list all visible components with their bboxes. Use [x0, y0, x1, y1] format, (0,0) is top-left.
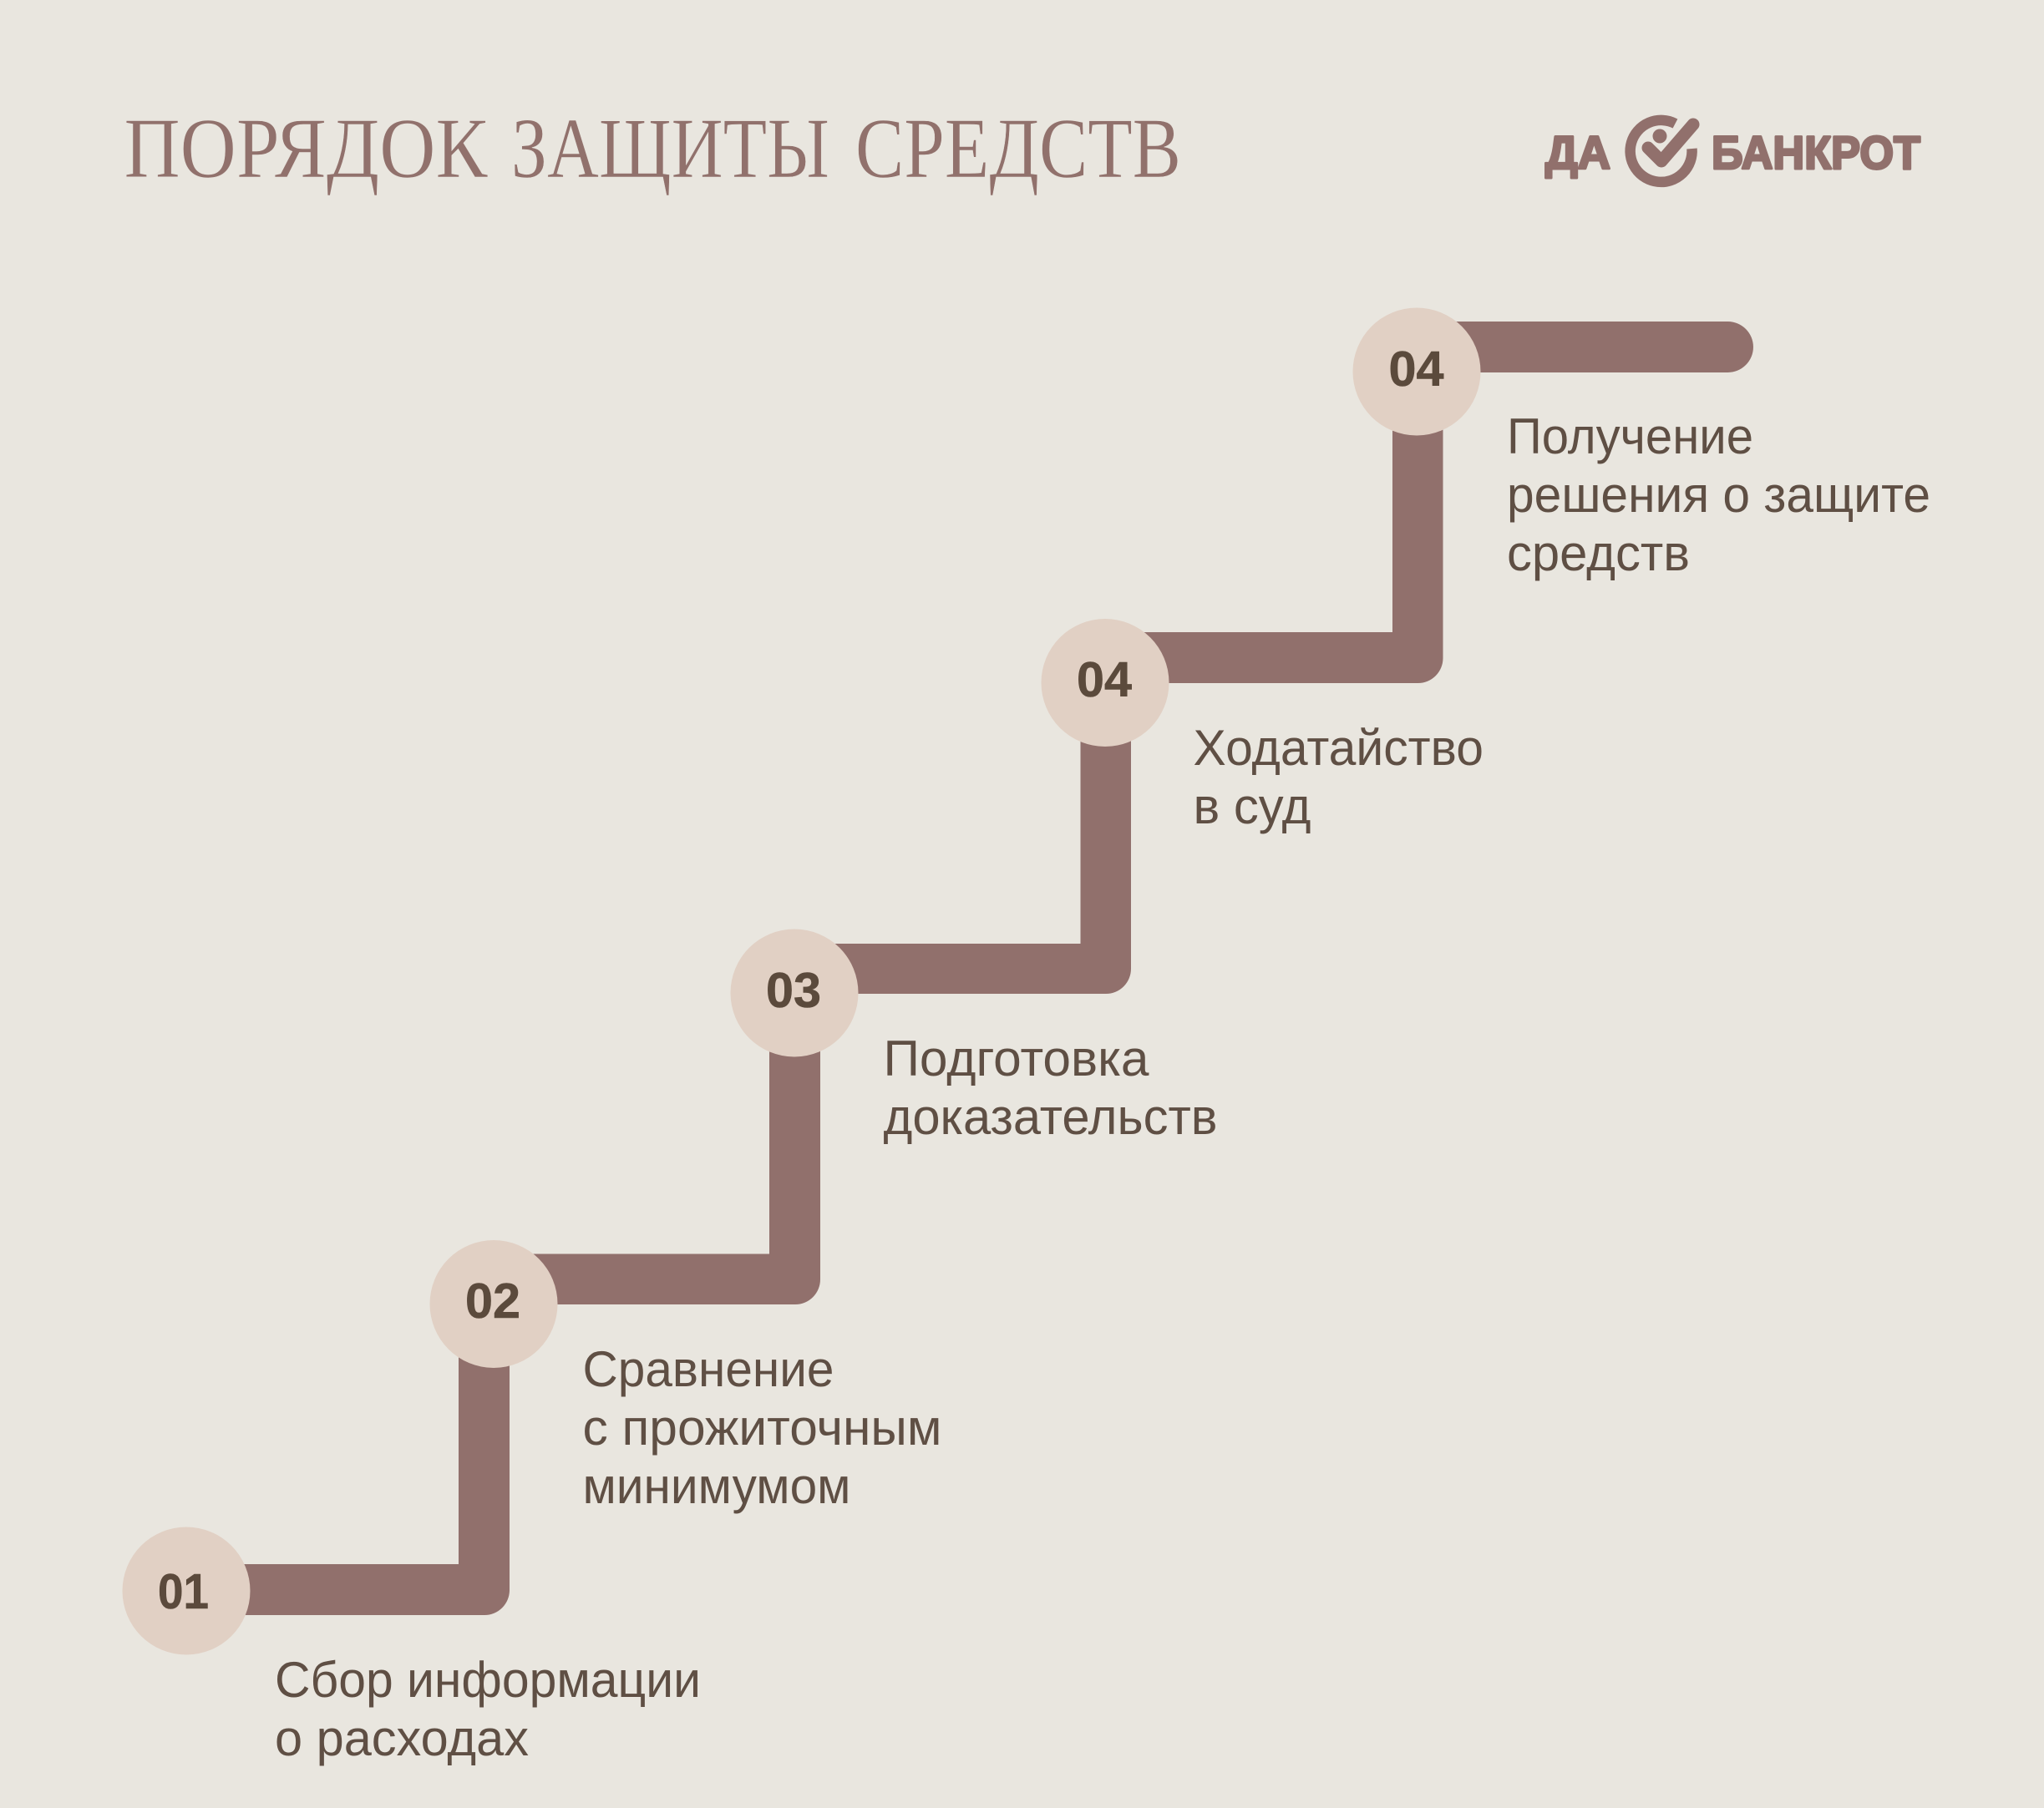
- step 2 circle: [429, 1240, 558, 1368]
- step 1: [122, 1527, 701, 1766]
- step 4: [1041, 619, 1484, 834]
- icon: ring with check mark: [1631, 120, 1693, 182]
- step 1 number: 01: [158, 1564, 209, 1619]
- step 1 text: о расходах: [275, 1710, 529, 1766]
- title: СРЕДСТВ: [855, 101, 1181, 196]
- step 2: [429, 1240, 942, 1514]
- step 1 text: [275, 1652, 701, 1766]
- step 1 text: Сбор информации: [275, 1652, 701, 1708]
- step 5 text: решения о защите: [1507, 467, 1930, 523]
- step 4 text: [1193, 720, 1484, 834]
- step 5 text: средств: [1507, 525, 1690, 581]
- step 4 text: Ходатайство: [1193, 720, 1484, 776]
- step 1 circle: [122, 1527, 251, 1655]
- title: [124, 101, 1181, 196]
- title: ЗАЩИТЫ: [511, 101, 829, 196]
- step 3 number: 03: [766, 963, 821, 1018]
- step 3 circle: [730, 929, 859, 1057]
- staircase path: [186, 322, 1753, 1615]
- step 2 text: Сравнение: [583, 1341, 834, 1397]
- step 5: [1353, 307, 1930, 581]
- step 2 text: с прожиточным: [583, 1400, 942, 1456]
- step 4 circle: [1041, 619, 1169, 747]
- logo word: ДА: ДА: [1545, 126, 1610, 179]
- step 2 number: 02: [465, 1274, 520, 1329]
- logo: Да Банкрот: [1545, 120, 1920, 182]
- step 3 text: доказательств: [884, 1089, 1218, 1145]
- step 2 text: [583, 1341, 942, 1514]
- step 4 number: 04: [1077, 652, 1132, 707]
- step 3 text: Подготовка: [884, 1031, 1149, 1086]
- title: ПОРЯДОК: [124, 101, 489, 196]
- step 4 text: в суд: [1193, 778, 1311, 834]
- step 5 text: [1507, 408, 1930, 581]
- step 5 number: 04: [1388, 342, 1444, 397]
- step 3: [730, 929, 1218, 1145]
- step 2 text: минимумом: [583, 1458, 850, 1514]
- logo word: БАНКРОТ: БАНКРОТ: [1712, 126, 1920, 179]
- step 3 text: [884, 1031, 1218, 1145]
- step 5 circle: [1353, 307, 1480, 436]
- step 5 text: Получение: [1507, 408, 1753, 464]
